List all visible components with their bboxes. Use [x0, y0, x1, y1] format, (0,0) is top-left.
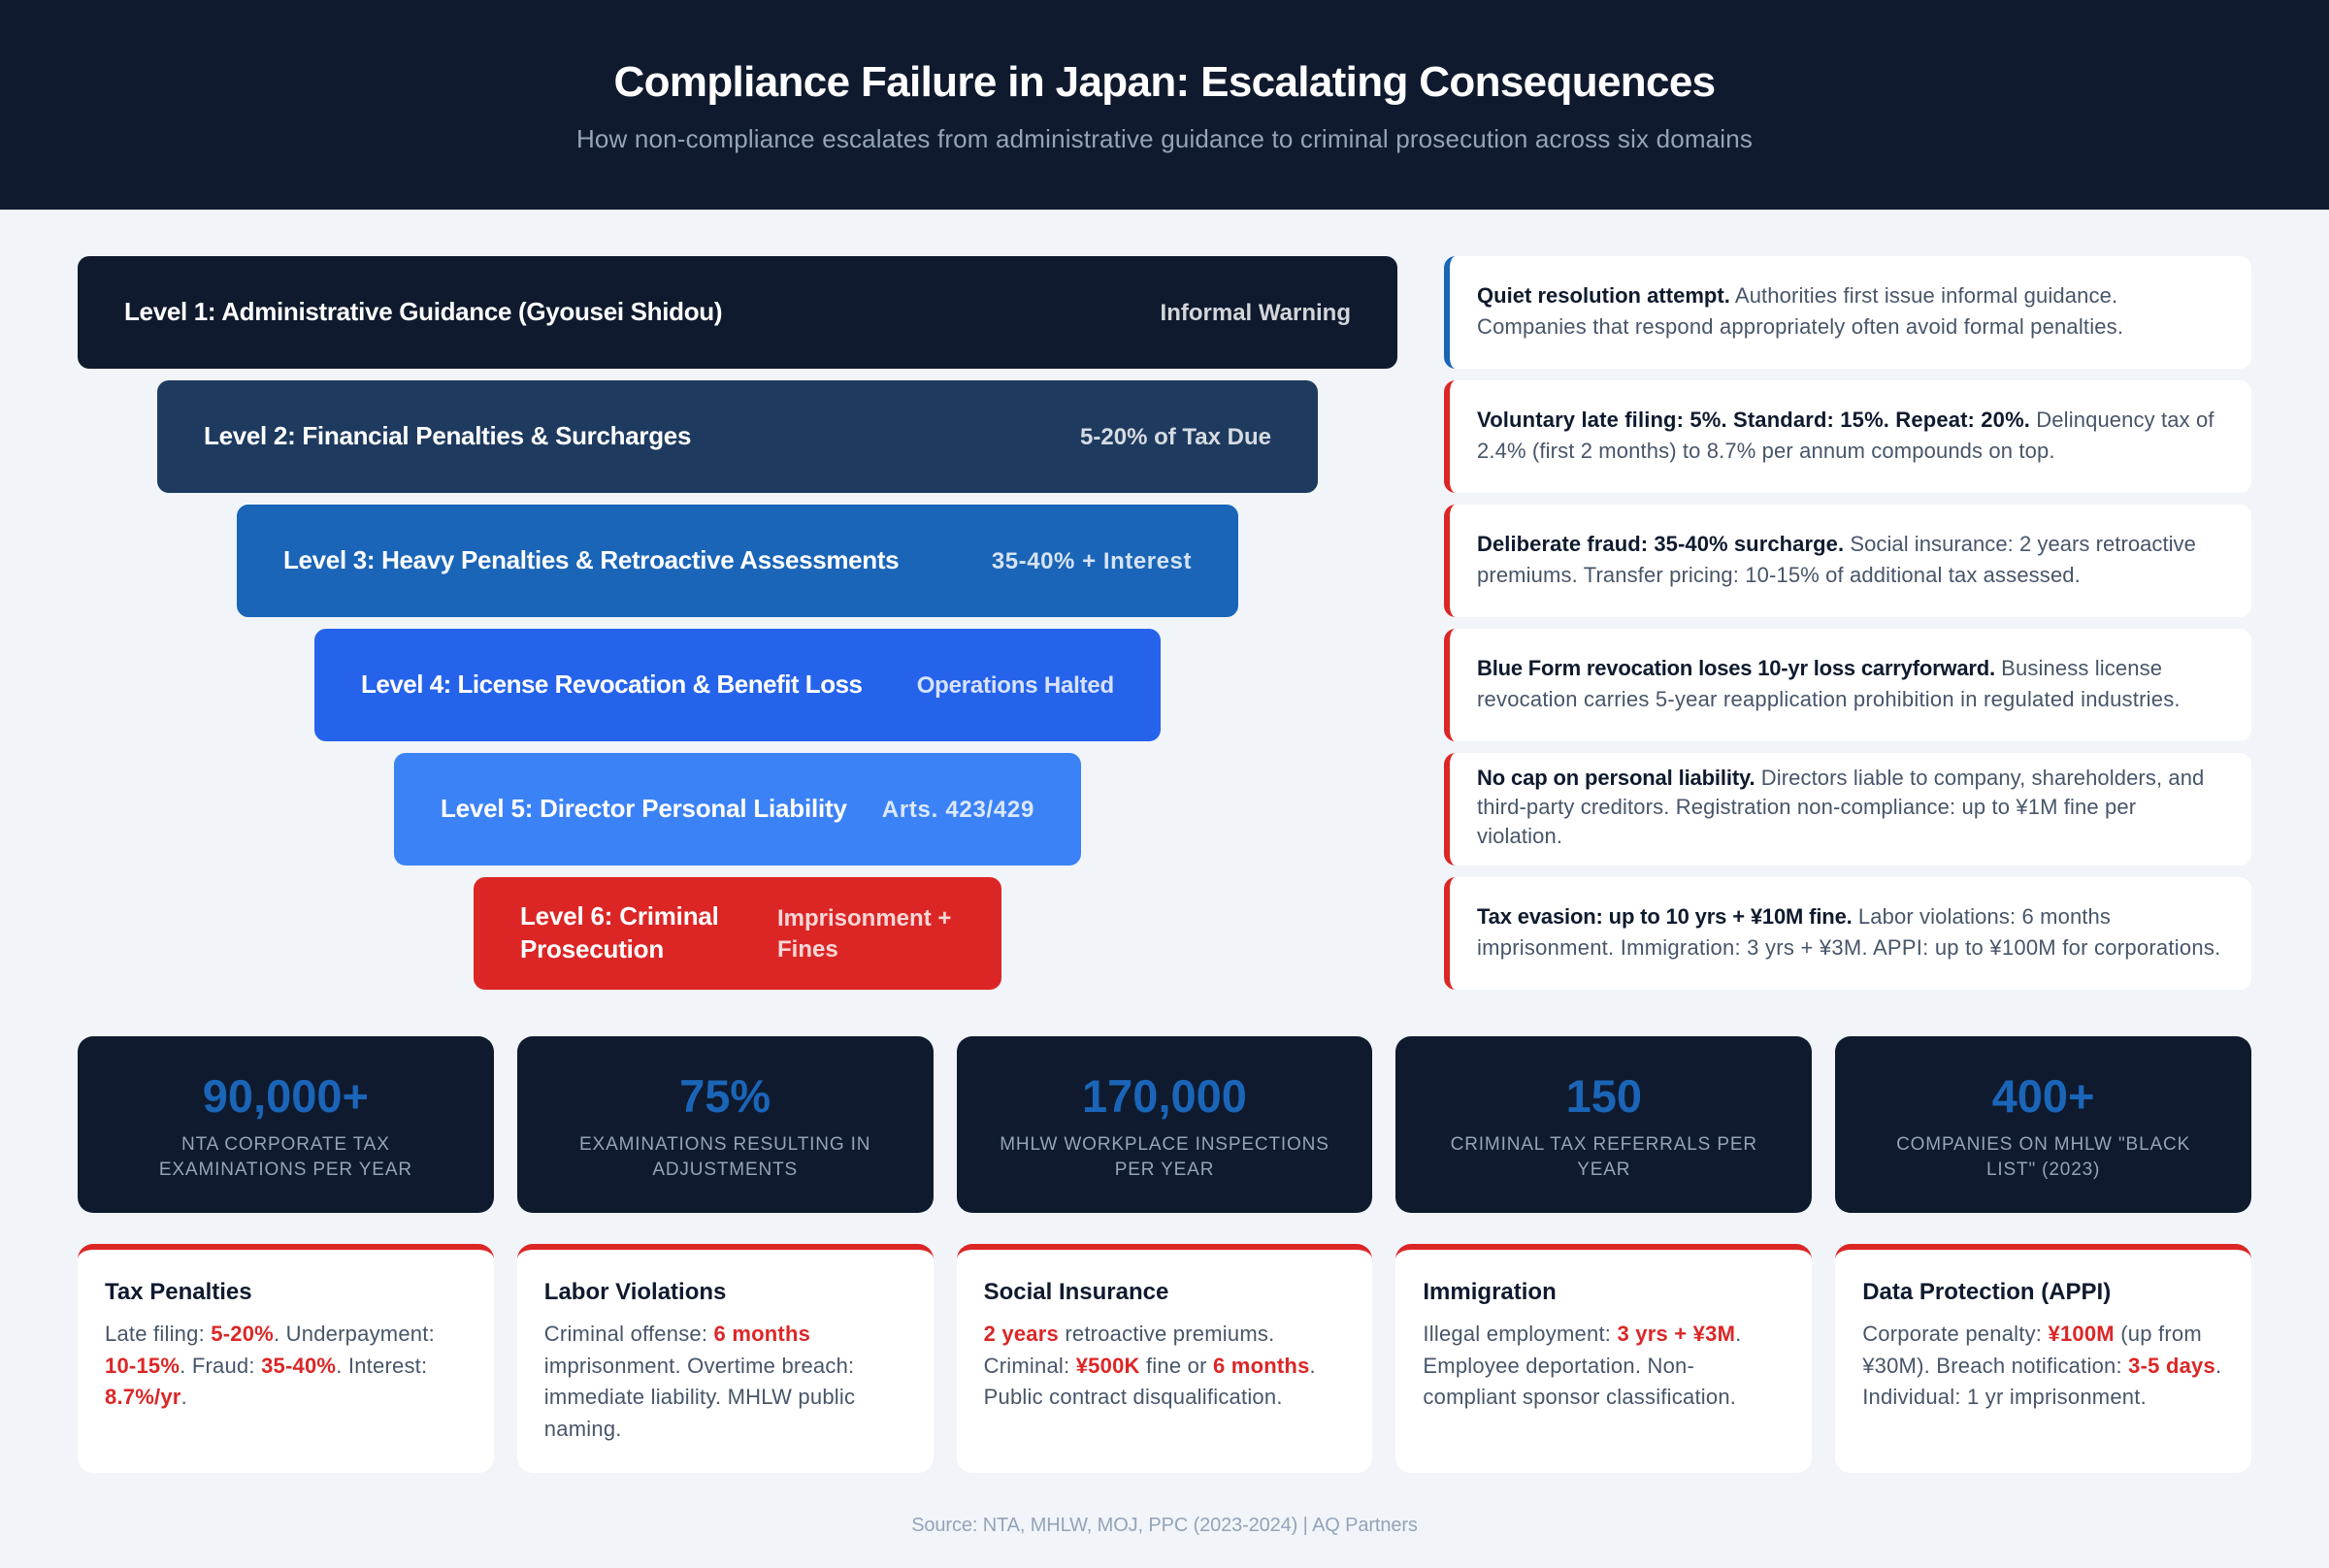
card: immigration — [1395, 1244, 1812, 1473]
card: tax penalties: 10-15%. Fraud: 35-40%. Interest: — [105, 1354, 427, 1378]
stat: adjustments: EXAMINATIONS RESULTING IN — [579, 1134, 870, 1155]
stat: criminal referrals: 150 — [1566, 1070, 1642, 1122]
funnel level 2: 5-20% of Tax Due — [1080, 424, 1271, 450]
header banner — [0, 0, 2329, 210]
funnel level 3 — [237, 505, 1238, 617]
stat: adjustments: 75% — [679, 1070, 771, 1122]
side note: level 5: No cap on personal liability. Directors liable to company, shareholders, and — [1477, 766, 2204, 790]
stat: tax examinations: 90,000+ — [203, 1070, 369, 1122]
card: labor violations: imprisonment. Overtime breach: — [544, 1354, 854, 1378]
stat: workplace inspections: 170,000 — [1082, 1070, 1247, 1122]
funnel level 1 — [78, 256, 1397, 369]
card: labor violations: naming. — [544, 1417, 622, 1441]
stat: criminal referrals: CRIMINAL TAX REFERRALS PER — [1451, 1134, 1757, 1155]
funnel level 6: Fines — [777, 936, 838, 963]
side note: level 3: premiums. Transfer pricing: 10-15% of additional tax assessed. — [1477, 563, 2081, 587]
card: social insurance — [957, 1244, 1372, 1473]
funnel level 6: Imprisonment + — [777, 905, 951, 931]
funnel level 5: Level 5: Director Personal Liability — [441, 794, 847, 823]
card: data protection — [1835, 1244, 2251, 1473]
funnel level 4 — [314, 629, 1161, 741]
card: data protection: Individual: 1 yr imprisonment. — [1862, 1385, 2147, 1409]
funnel level 6: Level 6: Criminal — [520, 900, 719, 930]
card: labor violations: immediate liability. MHLW public — [544, 1385, 855, 1409]
stat: criminal referrals — [1395, 1036, 1812, 1213]
stat: tax examinations: NTA CORPORATE TAX — [181, 1134, 390, 1155]
card: tax penalties: 8.7%/yr. — [105, 1385, 187, 1409]
stat: workplace inspections: MHLW WORKPLACE INSPECTIONS — [1000, 1134, 1329, 1155]
card: tax penalties: Tax Penalties — [105, 1279, 252, 1305]
card: social insurance: Criminal: ¥500K fine or 6 months. — [984, 1354, 1316, 1378]
source footer: Source: NTA, MHLW, MOJ, PPC (2023-2024) | AQ Partners — [911, 1515, 1418, 1536]
stat: black list: COMPANIES ON MHLW "BLACK — [1896, 1134, 2190, 1155]
card: tax penalties — [78, 1244, 494, 1473]
side note: level 6: imprisonment. Immigration: 3 yrs + ¥3M. APPI: up to ¥100M for corporations. — [1477, 935, 2220, 960]
stat: black list — [1835, 1036, 2251, 1213]
stat: workplace inspections: PER YEAR — [1115, 1160, 1214, 1180]
side note: level 5: third-party creditors. Registration non-compliance: up to ¥1M fine per — [1477, 795, 2136, 819]
title: Compliance Failure in Japan: Escalating Consequences — [613, 58, 1715, 106]
card: tax penalties: Late filing: 5-20%. Underpayment: — [105, 1322, 435, 1346]
card: immigration: Employee deportation. Non- — [1423, 1354, 1694, 1378]
side note: level 4: Blue Form revocation loses 10-yr loss carryforward. Business license — [1477, 656, 2162, 680]
stat: workplace inspections — [957, 1036, 1372, 1213]
funnel level 3: Level 3: Heavy Penalties & Retroactive Assessments — [283, 545, 899, 574]
funnel level 5: Arts. 423/429 — [882, 797, 1034, 823]
funnel level 4: Level 4: License Revocation & Benefit Loss — [361, 670, 862, 699]
funnel level 3: 35-40% + Interest — [992, 548, 1192, 574]
side note: level 1: Companies that respond appropriately often avoid formal penalties. — [1477, 314, 2123, 339]
card: immigration: Immigration — [1423, 1279, 1557, 1305]
funnel level 2 — [157, 380, 1318, 493]
funnel level 1: Informal Warning — [1161, 300, 1351, 326]
card: labor violations — [517, 1244, 934, 1473]
card: data protection: ¥30M). Breach notification: 3-5 days. — [1862, 1354, 2221, 1378]
funnel level 5 — [394, 753, 1081, 866]
stat: adjustments — [517, 1036, 934, 1213]
side note: level 3 — [1444, 505, 2251, 617]
funnel level 1: Level 1: Administrative Guidance (Gyousei Shidou) — [124, 297, 722, 326]
side note: level 2: 2.4% (first 2 months) to 8.7% per annum compounds on top. — [1477, 439, 2055, 463]
side note: level 4: revocation carries 5-year reapplication prohibition in regulated industries. — [1477, 687, 2181, 711]
side note: level 1: Quiet resolution attempt. Authorities first issue informal guidance. — [1477, 283, 2117, 308]
stat: black list: LIST" (2023) — [1986, 1160, 2100, 1180]
stat: tax examinations — [78, 1036, 494, 1213]
card: social insurance: Public contract disqualification. — [984, 1385, 1283, 1409]
card: data protection: Corporate penalty: ¥100M (up from — [1862, 1322, 2202, 1346]
card: labor violations: Labor Violations — [544, 1279, 726, 1305]
side note: level 2 — [1444, 380, 2251, 493]
funnel level 4: Operations Halted — [917, 672, 1114, 699]
side note: level 5: violation. — [1477, 824, 1562, 848]
side note: level 3: Deliberate fraud: 35-40% surcharge. Social insurance: 2 years retroactive — [1477, 532, 2196, 556]
card: data protection: Data Protection (APPI) — [1862, 1279, 2111, 1305]
side note: level 1 — [1444, 256, 2251, 369]
funnel level 2: Level 2: Financial Penalties & Surcharges — [204, 421, 691, 450]
side note: level 6: Tax evasion: up to 10 yrs + ¥10M fine. Labor violations: 6 months — [1477, 904, 2111, 929]
stat: black list: 400+ — [1992, 1070, 2095, 1122]
side note: level 5 — [1444, 753, 2251, 866]
card: social insurance: Social Insurance — [984, 1279, 1168, 1305]
stat: criminal referrals: YEAR — [1577, 1160, 1630, 1180]
card: labor violations: Criminal offense: 6 months — [544, 1322, 810, 1346]
side note: level 6 — [1444, 877, 2251, 990]
card: immigration: Illegal employment: 3 yrs + ¥3M. — [1423, 1322, 1741, 1346]
card: immigration: compliant sponsor classification. — [1423, 1385, 1736, 1409]
card: social insurance: 2 years retroactive premiums. — [984, 1322, 1274, 1346]
funnel level 6: Prosecution — [520, 933, 664, 963]
side note: level 2: Voluntary late filing: 5%. Standard: 15%. Repeat: 20%. Delinquency tax of — [1477, 408, 2214, 432]
funnel level 6 — [474, 877, 1001, 990]
subtitle: How non-compliance escalates from administrative guidance to criminal prosecution across six domains — [576, 124, 1753, 153]
stat: tax examinations: EXAMINATIONS PER YEAR — [159, 1160, 412, 1180]
stat: adjustments: ADJUSTMENTS — [652, 1160, 798, 1180]
side note: level 4 — [1444, 629, 2251, 741]
